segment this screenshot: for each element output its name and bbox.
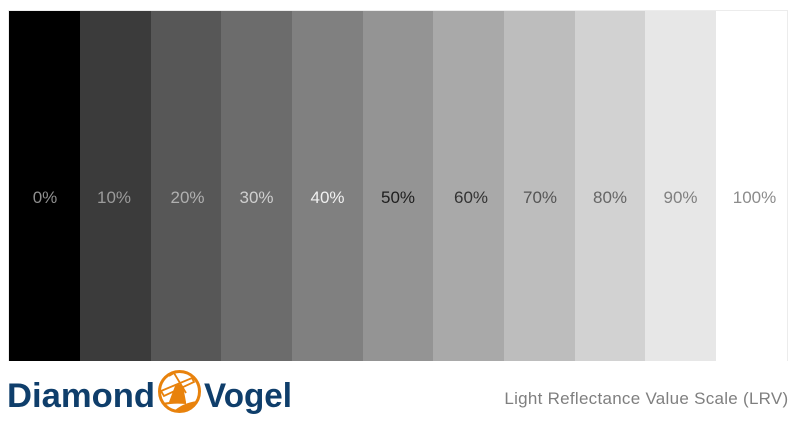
swatch: 30% <box>221 11 292 361</box>
swatch: 60%: 60% <box>454 188 488 207</box>
logo word: Vogel: Vogel <box>204 377 292 415</box>
swatch: 60% <box>433 11 504 361</box>
logo word: Diamond: Diamond <box>7 377 155 415</box>
swatch: 80% <box>575 11 645 361</box>
swatch: 90%: 90% <box>663 188 698 207</box>
swatch: 100% <box>716 11 787 361</box>
swatch: 0% <box>9 11 80 361</box>
swatch: 40% <box>292 11 363 361</box>
logo: Diamond Vogel <box>7 370 292 415</box>
swatch: 50%: 50% <box>381 188 415 207</box>
swatch: 100%: 100% <box>733 188 776 207</box>
swatch: 20% <box>151 11 221 361</box>
swatch: 10% <box>80 11 151 361</box>
swatch: 70%: 70% <box>523 188 557 207</box>
swatch: 90% <box>645 11 716 361</box>
swatch: 30%: 30% <box>239 188 274 207</box>
caption: Light Reflectance Value Scale (LRV) <box>504 389 788 408</box>
swatch: 80%: 80% <box>593 188 627 207</box>
icon: windmill emblem <box>160 372 200 412</box>
swatch: 70% <box>504 11 575 361</box>
swatch: 40%: 40% <box>310 188 345 207</box>
swatch: 0%: 0% <box>33 188 57 207</box>
swatch: 50% <box>363 11 433 361</box>
swatch: 20%: 20% <box>170 188 205 207</box>
swatch: 10%: 10% <box>97 188 131 207</box>
